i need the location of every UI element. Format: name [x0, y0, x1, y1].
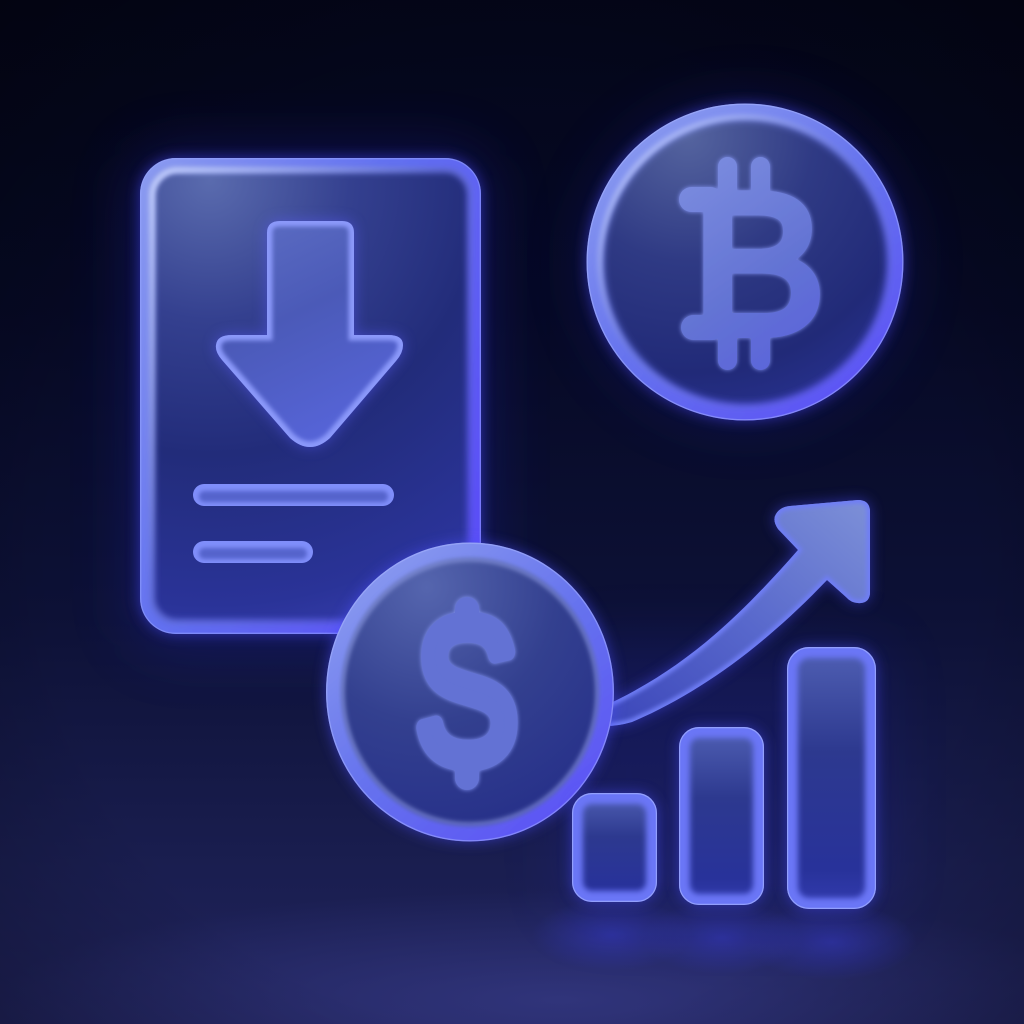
icon: bitcoin coin	[586, 104, 904, 420]
icon: dollar coin	[326, 542, 614, 842]
text line: long bar	[193, 484, 394, 506]
text line: short bar	[193, 541, 313, 563]
icon: download arrow	[210, 215, 410, 455]
bar chart	[572, 647, 876, 909]
floor reflection under bars	[532, 899, 917, 980]
bar: tall	[787, 647, 876, 909]
symbol: dollar sign: S	[416, 580, 518, 805]
symbol: bitcoin sign: B	[692, 153, 825, 376]
bar: medium	[679, 727, 764, 905]
icon: growth arrow	[595, 495, 875, 730]
bar: small	[572, 793, 657, 902]
panel: document card with download arrow	[140, 158, 481, 634]
